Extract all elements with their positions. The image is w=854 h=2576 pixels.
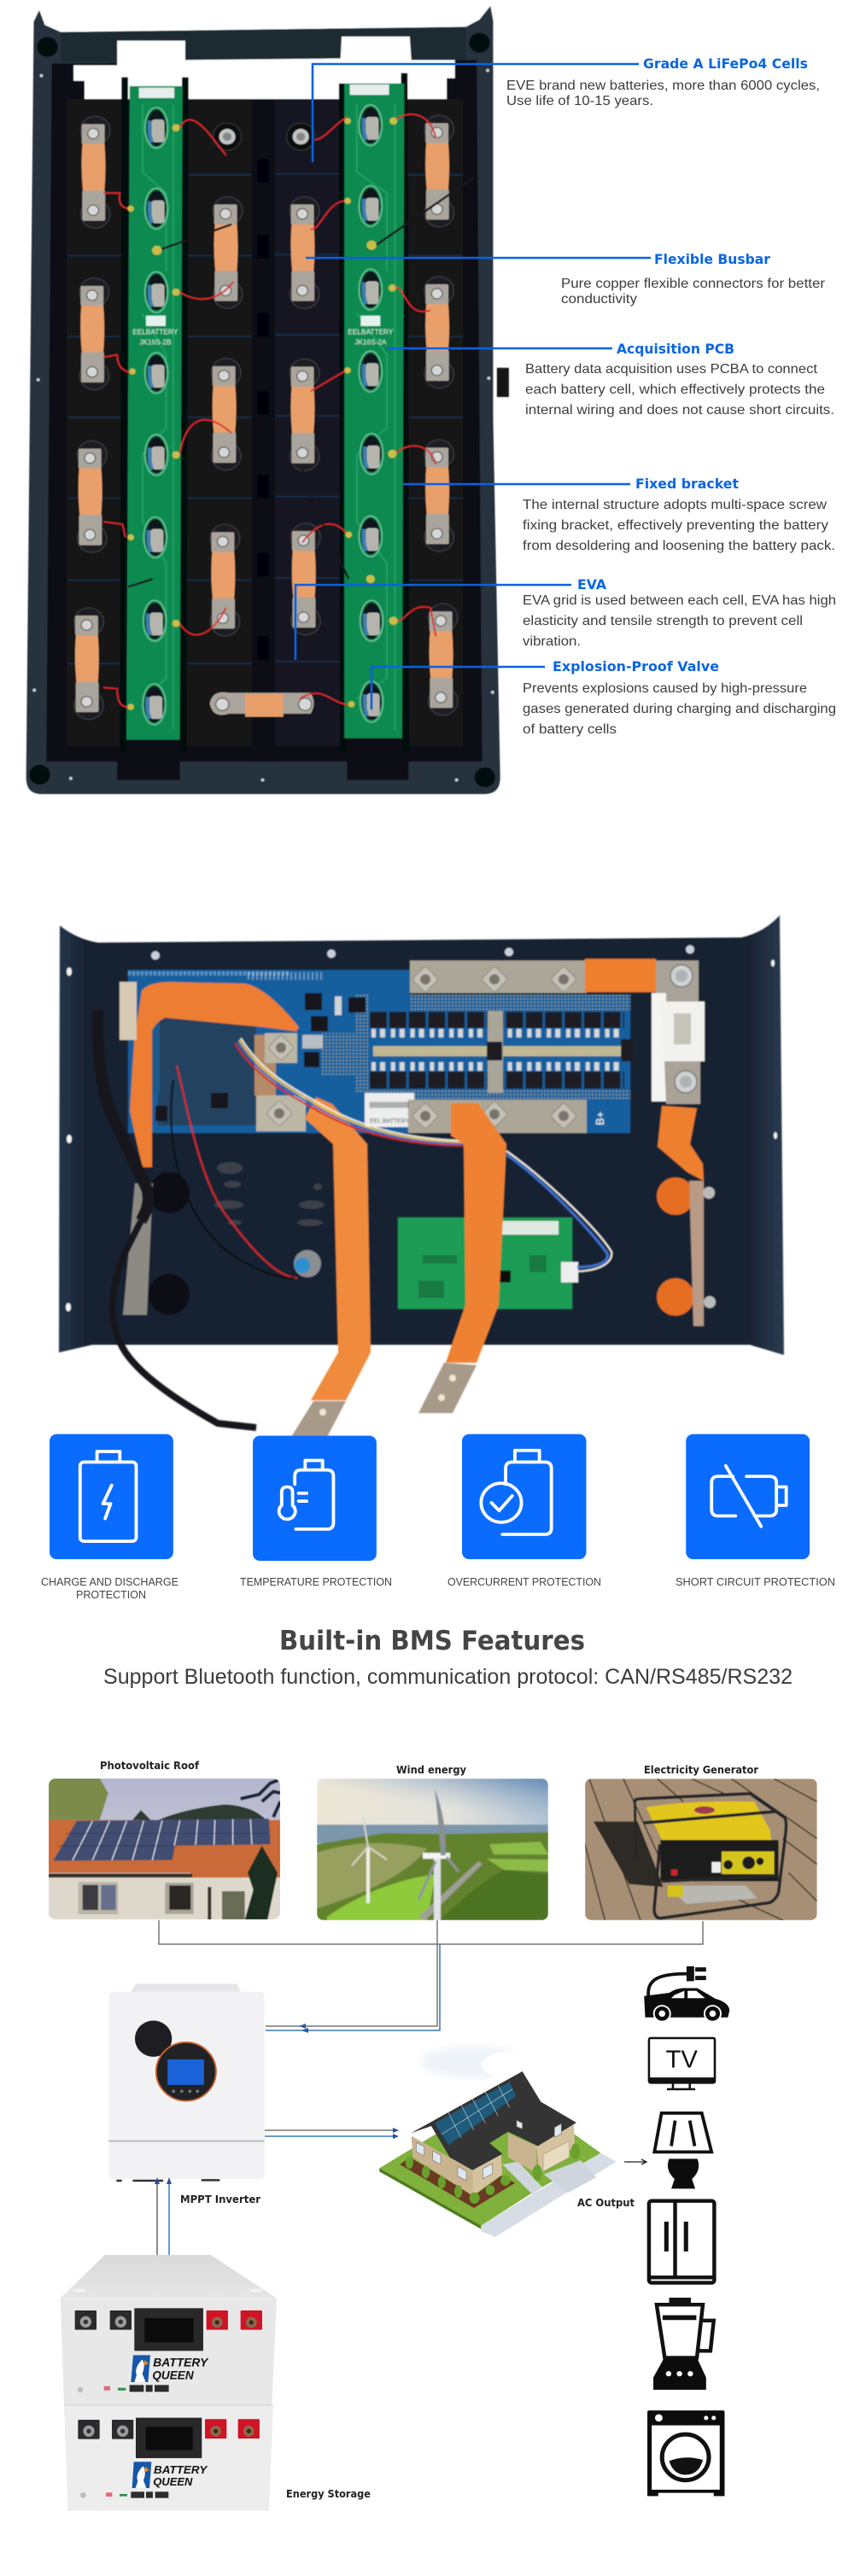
callout: Explosion-Proof Valve: of battery cells	[523, 722, 617, 737]
upper battery module	[75, 2308, 262, 2392]
terminals	[123, 1172, 716, 1326]
heading: Built-in BMS Features: Built-in BMS Features	[279, 1626, 585, 1656]
house illustration	[379, 2047, 617, 2237]
source label: Wind energy: Wind energy	[396, 1764, 466, 1776]
callout: Grade A LiFePo4 Cells: EVE brand new batteries, more than 6000 cycles,	[506, 79, 820, 93]
callout: Explosion-Proof Valve: Explosion-Proof Valve	[553, 658, 719, 675]
MPPT inverter	[108, 1983, 265, 2181]
bottom tabs	[117, 746, 409, 780]
protection labels	[41, 1575, 835, 1601]
right PCB	[342, 73, 406, 751]
icon: refrigerator	[649, 2201, 714, 2283]
arrows: battery to inverter	[155, 2177, 172, 2255]
callout: Grade A LiFePo4 Cells: Use life of 10-15 years.	[506, 94, 653, 108]
callout: Fixed bracket: fixing bracket, effectively preventing the battery	[523, 518, 828, 533]
busbars	[74, 115, 458, 720]
icon tile: charge and discharge protection	[50, 1434, 173, 1559]
arrows: inverter to house	[265, 2128, 399, 2139]
label: AC Output: AC Output	[577, 2197, 635, 2209]
callout: Explosion-Proof Valve	[371, 658, 836, 737]
left PCB	[123, 77, 185, 751]
BMS circuit board: B+	[594, 1112, 606, 1125]
BMS circuit board	[128, 970, 633, 1133]
lower battery module: QUEEN	[153, 2475, 193, 2488]
copper terminal plates	[254, 961, 587, 1133]
left PCB: EELBATTERY	[132, 329, 178, 336]
callout: Flexible Busbar	[306, 251, 826, 307]
right PCB: EELBATTERY	[348, 329, 394, 336]
screw terminals	[213, 123, 315, 150]
callout: Fixed bracket: from desoldering and loosening the battery pack.	[523, 539, 835, 553]
protection labels: CHARGE AND DISCHARGE	[41, 1575, 178, 1588]
tray holes and smudges	[66, 945, 777, 1311]
callout: EVA	[295, 576, 836, 660]
upper battery module: QUEEN	[152, 2369, 195, 2381]
subheading: communication protocol: Support Bluetooth function, communication protocol: CAN/RS485/RS232	[103, 1665, 793, 1689]
top opening	[73, 37, 455, 99]
callout: Fixed bracket	[403, 476, 835, 553]
arrow: house to appliances	[624, 2159, 646, 2164]
callout: Flexible Busbar: Flexible Busbar	[654, 251, 770, 267]
mounting holes and screws	[29, 32, 495, 787]
callout: Acquisition PCB: Battery data acquisition uses PCBA to connect	[525, 362, 818, 377]
left PCB: JK16S-2B	[139, 338, 171, 346]
callout: Fixed bracket: The internal structure adopts multi-space screw	[523, 498, 827, 512]
callout: Acquisition PCB: each battery cell, which effectively protects the	[525, 383, 825, 397]
icon tile: short circuit protection	[686, 1434, 810, 1559]
protection labels: PROTECTION	[76, 1588, 146, 1601]
side connector	[497, 368, 509, 397]
callout: Grade A LiFePo4 Cells: Grade A LiFePo4 Cells	[643, 55, 808, 72]
BMS circuit board: EEL BATTERY	[370, 1119, 410, 1124]
icon: lamp	[654, 2113, 711, 2188]
photo: electricity generator	[585, 1779, 817, 1920]
callout: EVA: vibration.	[523, 634, 581, 649]
callout: EVA: EVA grid is used between each cell, EVA has high	[523, 593, 836, 608]
panel: battery pack internal photo	[26, 6, 509, 794]
callout: Flexible Busbar: Pure copper flexible connectors for better	[561, 277, 826, 291]
icon: electric car	[644, 1966, 729, 2022]
icon: TV	[649, 2038, 715, 2089]
label: Energy Storage: Energy Storage	[286, 2488, 371, 2500]
callout: Flexible Busbar: conductivity	[561, 292, 637, 307]
icon tile: temperature protection	[253, 1435, 377, 1561]
callout: Acquisition PCB: Acquisition PCB	[617, 341, 734, 357]
metal tray	[59, 915, 784, 1355]
callout: Acquisition PCB: internal wiring and does not cause short circuits.	[525, 403, 834, 418]
lower battery module: BATTERY	[154, 2463, 208, 2476]
communication board	[398, 1218, 578, 1309]
photo: photovoltaic roof	[49, 1779, 280, 1919]
source label: Photovoltaic Roof: Photovoltaic Roof	[100, 1760, 200, 1772]
icon: blender	[653, 2298, 714, 2390]
lower battery module	[78, 2418, 260, 2498]
icon: washing machine	[647, 2410, 724, 2496]
callout: Explosion-Proof Valve: gases generated during charging and discharging	[523, 702, 836, 716]
icon: TV: TV	[665, 2047, 699, 2073]
callout: Acquisition PCB	[388, 341, 834, 418]
wire harness	[97, 1009, 611, 1428]
protection labels: OVERCURRENT PROTECTION	[447, 1575, 601, 1588]
icon tile: overcurrent protection	[462, 1434, 586, 1559]
photo: wind energy	[317, 1779, 548, 1920]
callout: Fixed bracket: Fixed bracket	[635, 476, 739, 492]
fuse and orange busbars	[120, 959, 705, 1437]
callout: EVA: EVA	[577, 576, 607, 593]
upper battery module: BATTERY	[153, 2357, 209, 2369]
red sense wires	[103, 114, 474, 710]
right PCB: JK16S-2A	[354, 338, 387, 346]
panel: BMS board photo	[59, 915, 784, 1437]
callout: Grade A LiFePo4 Cells	[313, 55, 820, 162]
protection labels: SHORT CIRCUIT PROTECTION	[676, 1575, 835, 1588]
metal case frame	[26, 6, 500, 794]
protection labels: TEMPERATURE PROTECTION	[240, 1575, 392, 1588]
cell columns	[67, 99, 463, 762]
label: MPPT Inverter: MPPT Inverter	[180, 2193, 260, 2205]
orange strap over wires	[418, 1103, 506, 1413]
battery stack	[61, 2255, 277, 2511]
source label: Electricity Generator: Electricity Generator	[644, 1764, 758, 1776]
connector lines: sources to inverter	[159, 1920, 703, 2033]
callout: EVA: elasticity and tensile strength to prevent cell	[523, 614, 803, 628]
callout: Explosion-Proof Valve: Prevents explosions caused by high-pressure	[523, 681, 807, 696]
